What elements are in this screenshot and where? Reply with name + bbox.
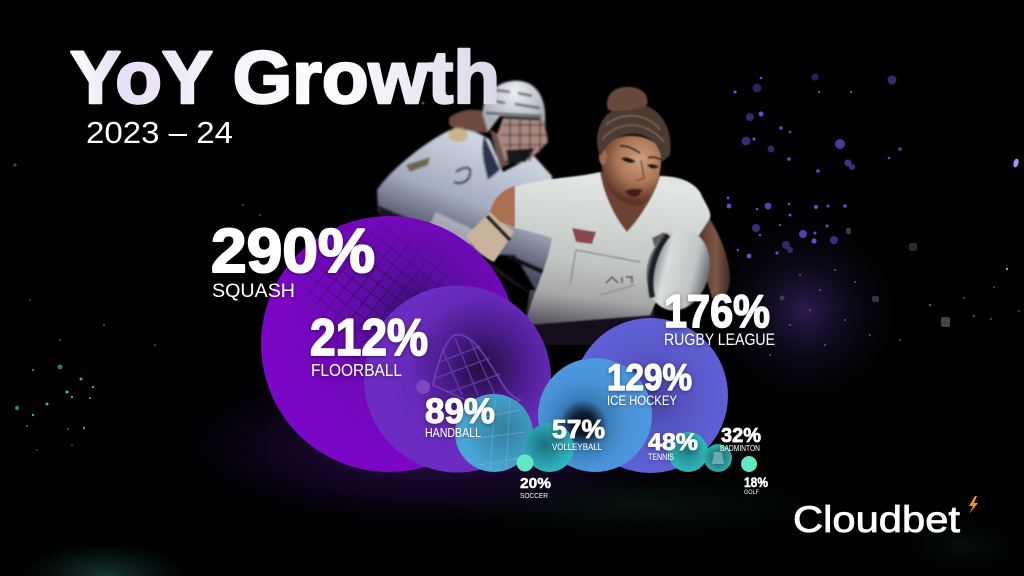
shirt folds [570,250,640,295]
right arm [695,205,730,299]
bubble: badminton [704,444,732,472]
bubble: squash [261,216,517,472]
neck [600,170,660,232]
hockey stick [507,256,548,274]
bubble: golf [741,456,757,472]
label: squash: SQUASH [212,280,295,302]
label: soccer [520,475,551,500]
bubble: soccer [516,454,534,472]
bubble: rugby league [573,318,728,473]
label: volleyball: VOLLEYBALL [552,442,602,453]
background particles: teal [13,102,425,451]
rugby ball [638,223,718,317]
bubble chart [261,216,757,473]
label: soccer: 20% [520,475,551,492]
shirt sponsor [606,277,632,283]
bubble: handball [455,394,533,472]
shorts fade [520,290,660,345]
left forearm [466,212,514,262]
title: YoY Growth [70,36,500,119]
photo: ice hockey player [377,81,556,300]
label: floorball: FLOORBALL [311,360,402,380]
ear [599,149,607,165]
label: ice hockey: ICE HOCKEY [607,393,677,408]
hair [597,104,671,162]
hockey jersey [377,129,556,298]
bubble: floorball [364,286,551,472]
label: rugby league: RUGBY LEAGUE [664,331,775,349]
label: ice hockey: 129% [607,357,692,398]
label: soccer: SOCCER [520,491,549,500]
hockey hair [449,110,490,133]
hockey helmet [483,81,545,132]
label: squash: 290% [211,217,375,286]
label: volleyball: 57% [552,414,605,444]
shirt crest [572,228,596,244]
label: floorball: 212% [310,309,428,367]
subtitle: 2023 – 24 [86,115,233,150]
icon: orange lightning bolt [969,496,978,514]
label: tennis: TENNIS [648,452,674,462]
hockey face and cage [497,118,548,160]
bubble: tennis [668,432,708,472]
upper left arm [490,186,517,228]
background particles: pale dust [769,228,1020,356]
photo: rugby player [466,87,730,345]
hockey neck [490,130,522,168]
label: handball: 89% [425,392,495,431]
white shirt [515,172,710,325]
eyes and mouth [620,146,662,197]
label: rugby league: 176% [664,285,770,337]
label: golf: 18% [744,474,768,490]
label: badminton: 32% [721,425,761,447]
logo: Cloudbet: Cloudbet [793,499,961,540]
hockey patches [448,128,468,142]
bubble: ice hockey [538,358,652,472]
background glows [20,215,1024,576]
label: badminton: BADMINTON [720,444,760,453]
face [601,136,661,206]
bubble: volleyball [525,423,574,472]
label: golf: GOLF [744,489,759,496]
background particles: purple [726,74,1020,258]
label: handball: HANDBALL [425,426,481,440]
hair bun [607,87,648,111]
hockey lower body shadow [378,205,540,300]
hockey collar [482,135,500,180]
label: tennis: 48% [648,429,698,456]
label: golf [744,474,768,496]
